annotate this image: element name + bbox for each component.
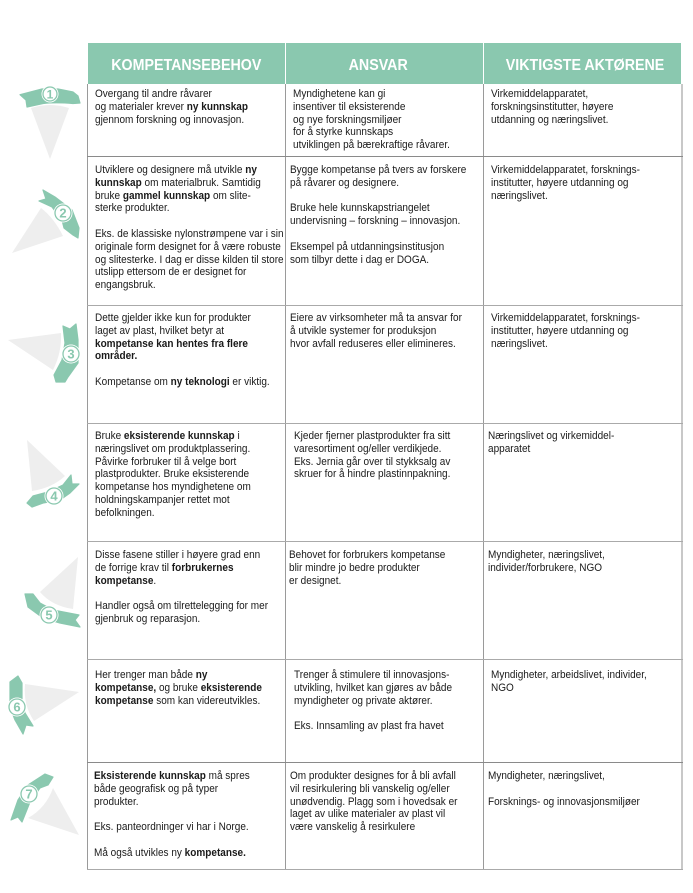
row 4: ansvar: skruer for å hindre plastinnpakning. xyxy=(294,468,450,480)
row 6: kompetansebehov: Her trenger man både ny xyxy=(95,669,207,681)
row 2: ansvar: undervisning – forskning – innovasjon. xyxy=(290,215,460,227)
icon: step 6: 6 xyxy=(13,700,21,714)
row 1: aktører: Virkemiddelapparatet, xyxy=(491,88,588,100)
row 4: kompetansebehov: Påvirke forbruker til å velge bort xyxy=(95,456,236,468)
row 1: ansvar xyxy=(293,88,450,151)
row 2: aktører xyxy=(491,164,640,202)
icon: step 7: 7 xyxy=(25,786,33,802)
icon: step 3 xyxy=(8,324,80,382)
row 7: ansvar: vil resirkulering bli vanskelig og/eller xyxy=(290,783,450,795)
row 2: aktører: institutter, høyere utdanning og xyxy=(491,177,628,189)
row 7: ansvar: være vanskelig å resirkulere xyxy=(290,821,415,833)
row 7: kompetansebehov: Eks. panteordninger vi har i Norge. xyxy=(94,821,249,833)
icon: step 5 xyxy=(25,557,80,627)
row 2: kompetansebehov: bruke gammel kunnskap om slite- xyxy=(95,190,251,202)
row 6: kompetansebehov: kompetanse, og bruke eksisterende xyxy=(95,682,262,694)
header: viktigste aktørene: VIKTIGSTE AKTØRENE xyxy=(506,57,665,74)
row 1: aktører: forskningsinstitutter, høyere xyxy=(491,101,613,113)
row 6: ansvar xyxy=(294,669,452,732)
row 5: kompetansebehov: gjenbruk og reparasjon. xyxy=(95,613,200,625)
row 2: ansvar: Bruke hele kunnskapstriangelet xyxy=(290,202,430,214)
row 2: kompetansebehov: Utviklere og designere må utvikle ny xyxy=(95,164,257,176)
icon: step 4: 4 xyxy=(50,488,58,504)
row 1: ansvar: utviklingen på bærekraftige råvarer. xyxy=(293,139,450,151)
row 2: kompetansebehov: sterke produkter. xyxy=(95,202,170,214)
step icons xyxy=(8,86,81,835)
row 2: kompetansebehov: kunnskap om materialbruk. Samtidig xyxy=(95,177,261,189)
row 4: ansvar: varesortiment og/eller verdikjede. xyxy=(294,443,441,455)
row 3: kompetansebehov: laget av plast, hvilket betyr at xyxy=(95,325,224,337)
row 3: aktører xyxy=(491,312,640,350)
row 4: kompetansebehov: Bruke eksisterende kunnskap i xyxy=(95,430,240,442)
row 6: ansvar: utvikling, hvilket kan gjøres av både xyxy=(294,682,452,694)
row 3: kompetansebehov: Dette gjelder ikke kun for produkter xyxy=(95,312,251,324)
row 4: kompetansebehov: kompetanse hos myndighetene om xyxy=(95,481,251,493)
row 1: kompetansebehov: Overgang til andre råvarer xyxy=(95,88,212,100)
row 5: aktører: Myndigheter, næringslivet, xyxy=(488,549,605,561)
row 1: ansvar: for å styrke kunnskaps xyxy=(293,126,393,138)
row 1: kompetansebehov: gjennom forskning og innovasjon. xyxy=(95,114,244,126)
header: viktigste aktørene xyxy=(484,43,681,84)
row 4: kompetansebehov: næringslivet om produktplassering. xyxy=(95,443,250,455)
header: kompetansebehov: KOMPETANSEBEHOV xyxy=(111,57,262,74)
row 3: kompetansebehov: kompetanse kan hentes fra flere xyxy=(95,338,248,350)
header: ansvar: ANSVAR xyxy=(349,57,408,74)
row 2: kompetansebehov: Eks. de klassiske nylonstrømpene var i sin xyxy=(95,228,284,240)
row 5: aktører: individer/forbrukere, NGO xyxy=(488,562,602,574)
row 7: ansvar: laget av ulike materialer av plast vil xyxy=(290,808,445,820)
row 2: aktører: Virkemiddelapparatet, forsknings- xyxy=(491,164,640,176)
row 2: ansvar: på råvarer og designere. xyxy=(290,177,399,189)
row 6: ansvar: Trenger å stimulere til innovasjons- xyxy=(294,669,449,681)
row 2: ansvar xyxy=(290,164,466,266)
icon: step 3: 3 xyxy=(67,346,75,362)
row 5: kompetansebehov: Disse fasene stiller i høyere grad enn xyxy=(95,549,260,561)
row 1: kompetansebehov xyxy=(95,88,248,126)
icon: step 6 xyxy=(8,676,79,734)
row 1: ansvar: Myndighetene kan gi xyxy=(293,88,385,100)
row 4: ansvar xyxy=(294,430,450,480)
header: ansvar xyxy=(286,43,483,84)
row 4: aktører: apparatet xyxy=(488,443,530,455)
row 7: kompetansebehov: både geografisk og på typer xyxy=(94,783,218,795)
row 4: ansvar: Eks. Jernia går over til stykksalg av xyxy=(294,456,450,468)
row 6: kompetansebehov: kompetanse som kan videreutvikles. xyxy=(95,695,260,707)
row 6: ansvar: Eks. Innsamling av plast fra havet xyxy=(294,720,444,732)
row 1: aktører: utdanning og næringslivet. xyxy=(491,114,608,126)
header: kompetansebehov xyxy=(88,43,285,84)
row 6: kompetansebehov xyxy=(95,669,262,707)
icon: step 7 xyxy=(11,774,79,835)
row 7: kompetansebehov: produkter. xyxy=(94,796,139,808)
row 5: kompetansebehov: Handler også om tilrettelegging for mer xyxy=(95,600,268,612)
row 2: ansvar: som tilbyr dette i dag er DOGA. xyxy=(290,254,429,266)
row 5: kompetansebehov: de forrige krav til forbrukernes xyxy=(95,562,234,574)
row 7: ansvar xyxy=(290,770,458,833)
row 6: aktører: NGO xyxy=(491,682,514,694)
row 1: kompetansebehov: og materialer krever ny kunnskap xyxy=(95,101,248,113)
row 2: aktører: næringslivet. xyxy=(491,190,548,202)
row 3: ansvar: å utvikle systemer for produksjon xyxy=(290,325,436,337)
row 3: ansvar: Eiere av virksomheter må ta ansvar for xyxy=(290,312,462,324)
row 7: aktører xyxy=(488,770,640,808)
row 2: kompetansebehov: utslipp ettersom de er designet for xyxy=(95,266,246,278)
row 3: kompetansebehov: områder. xyxy=(95,350,137,362)
row 5: ansvar xyxy=(289,549,445,587)
icon: step 5: 5 xyxy=(45,608,53,622)
row 3: kompetansebehov xyxy=(95,312,270,388)
row 4: kompetansebehov xyxy=(95,430,251,519)
row 6: aktører: Myndigheter, arbeidslivet, individer, xyxy=(491,669,647,681)
row 1: aktører xyxy=(491,88,613,126)
row 3: kompetansebehov: Kompetanse om ny teknologi er viktig. xyxy=(95,376,270,388)
row 7: aktører: Forsknings- og innovasjonsmiljøer xyxy=(488,796,640,808)
row 5: ansvar: blir mindre jo bedre produkter xyxy=(289,562,420,574)
row 5: ansvar: er designet. xyxy=(289,575,341,587)
row 7: kompetansebehov: Eksisterende kunnskap må spres xyxy=(94,770,250,782)
icon: step 2 xyxy=(12,190,79,253)
row 3: aktører: institutter, høyere utdanning og xyxy=(491,325,628,337)
row 1: ansvar: og nye forskningsmiljøer xyxy=(293,114,401,126)
row 5: kompetansebehov xyxy=(95,549,268,625)
row 2: ansvar: Bygge kompetanse på tvers av forskere xyxy=(290,164,466,176)
row 4: aktører xyxy=(488,430,614,455)
row 2: ansvar: Eksempel på utdanningsinstitusjon xyxy=(290,241,444,253)
row 4: kompetansebehov: befolkningen. xyxy=(95,507,155,519)
row 2: kompetansebehov: originale form designet for å være robuste xyxy=(95,241,281,253)
row 1: ansvar: insentiver til eksisterende xyxy=(293,101,405,113)
row 4: kompetansebehov: plastprodukter. Bruke eksisterende xyxy=(95,468,249,480)
icon: step 1: 1 xyxy=(47,88,54,102)
row 7: aktører: Myndigheter, næringslivet, xyxy=(488,770,605,782)
row 2: kompetansebehov: og slitesterke. I dag er disse kilden til store xyxy=(95,254,284,266)
row 7: ansvar: unødvendig. Plagg som i hovedsak er xyxy=(290,796,457,808)
row 3: ansvar: hvor avfall reduseres eller elimineres. xyxy=(290,338,456,350)
row 2: kompetansebehov: engangsbruk. xyxy=(95,279,156,291)
row 4: aktører: Næringslivet og virkemiddel- xyxy=(488,430,614,442)
row 5: ansvar: Behovet for forbrukers kompetanse xyxy=(289,549,445,561)
row 4: ansvar: Kjeder fjerner plastprodukter fra sitt xyxy=(294,430,450,442)
row 3: aktører: næringslivet. xyxy=(491,338,548,350)
icon: step 1 xyxy=(20,86,80,159)
icon: step 4 xyxy=(27,440,79,507)
row 3: aktører: Virkemiddelapparatet, forsknings- xyxy=(491,312,640,324)
row 5: kompetansebehov: kompetanse. xyxy=(95,575,156,587)
row 7: kompetansebehov: Må også utvikles ny kompetanse. xyxy=(94,847,246,859)
row 4: kompetansebehov: holdningskampanjer rettet mot xyxy=(95,494,230,506)
row 6: ansvar: myndigheter og private aktører. xyxy=(294,695,433,707)
row 5: aktører xyxy=(488,549,605,574)
row 6: aktører xyxy=(491,669,647,694)
row 3: ansvar xyxy=(290,312,462,350)
icon: step 2: 2 xyxy=(59,206,67,220)
row 2: kompetansebehov xyxy=(95,164,284,291)
row 7: kompetansebehov xyxy=(94,770,250,859)
row 7: ansvar: Om produkter designes for å bli avfall xyxy=(290,770,456,782)
